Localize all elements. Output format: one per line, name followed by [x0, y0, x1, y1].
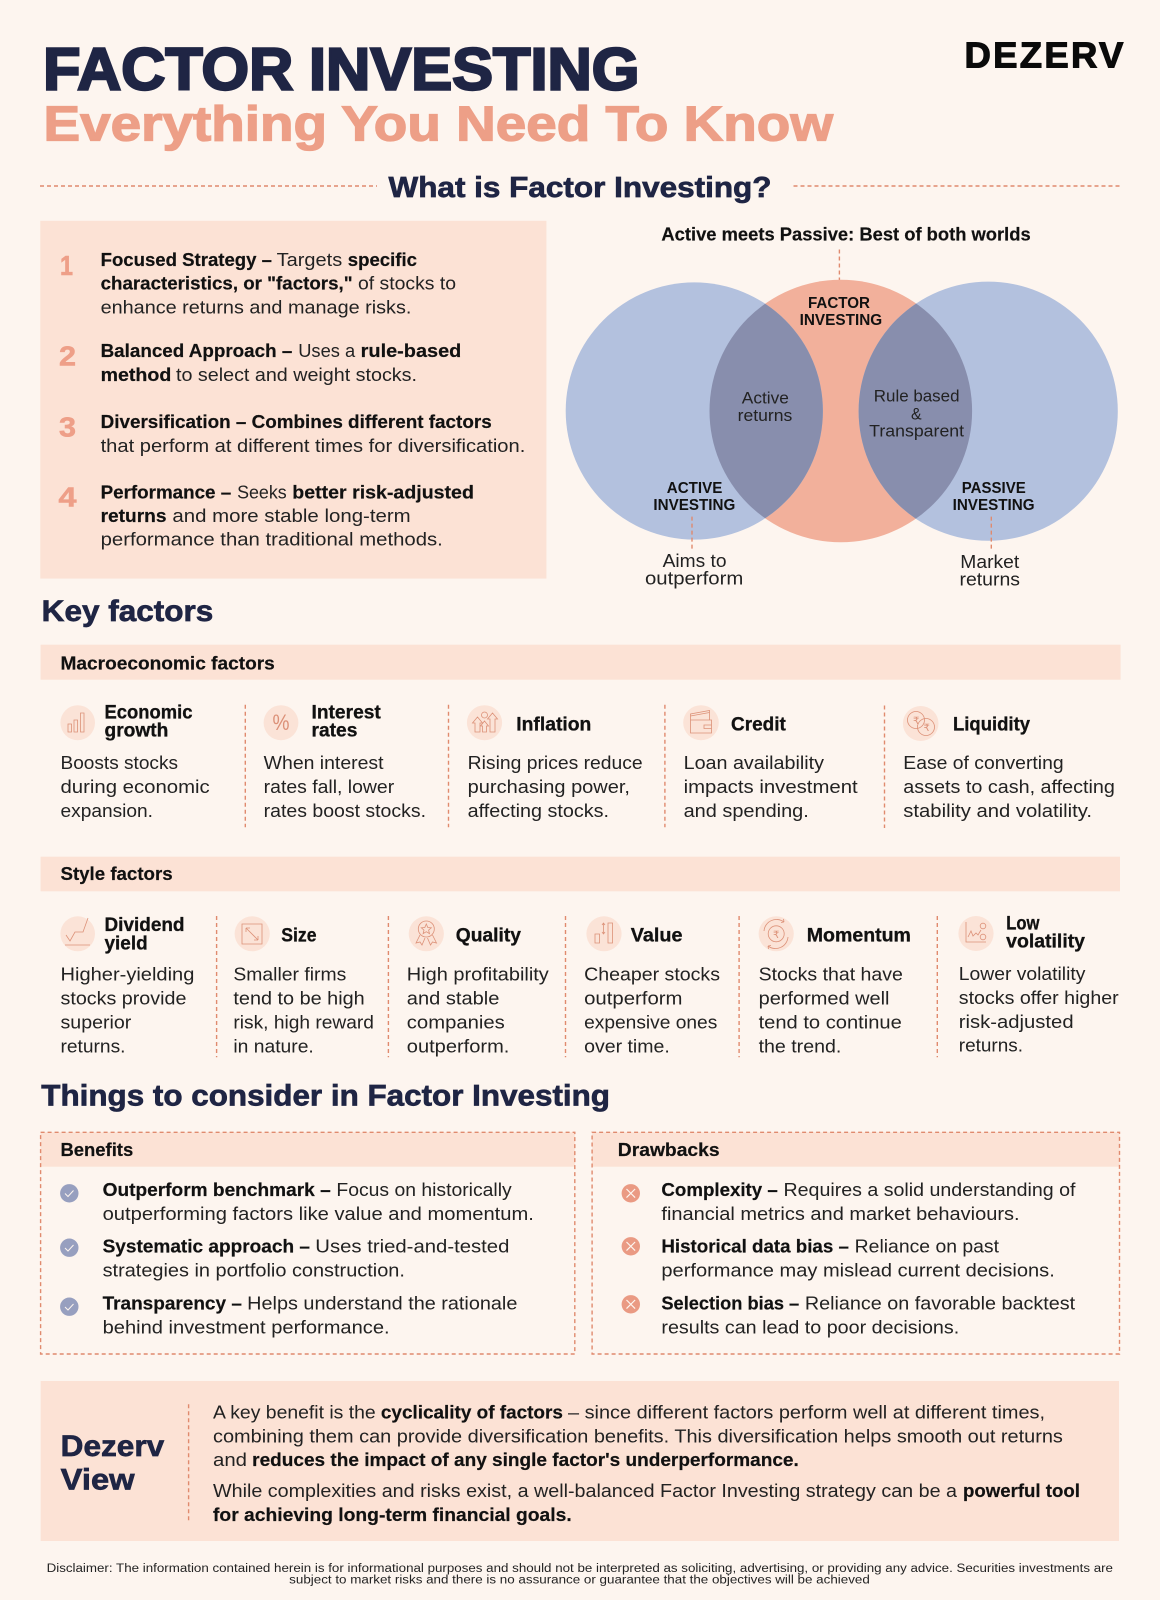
style factor: value: outperform — [584, 988, 682, 1009]
label: passive investing — [953, 480, 1035, 514]
drawback: historical data bias: performance may mislead current decisions. — [661, 1260, 1055, 1281]
title — [43, 36, 834, 152]
style factor: size — [233, 916, 374, 1056]
heading: key factors: Key factors — [42, 595, 213, 628]
item 1: focused strategy: Focused Strategy – — [101, 249, 272, 270]
macro factor: credit — [683, 705, 858, 821]
heading: dezerv view: View — [61, 1463, 135, 1496]
drawback: historical data bias — [622, 1236, 1055, 1281]
style factor: value: Value — [631, 925, 682, 946]
style factor: quality: outperform. — [407, 1035, 509, 1056]
icon: rupee cycle: ₹ — [773, 930, 779, 941]
macro factor: interest rates: rates boost stocks. — [264, 800, 426, 821]
benefit: transparency: Helps understand the rationale — [247, 1292, 517, 1313]
icon: rosette — [409, 916, 444, 951]
item 2: balanced approach — [59, 340, 461, 385]
drawback: selection bias: Reliance on favorable backtest — [805, 1292, 1075, 1313]
style factor: dividend yield: Higher-yielding — [60, 964, 194, 985]
benefit: transparency: Transparency – — [103, 1292, 242, 1313]
section band: macroeconomic factors: Macroeconomic factors — [60, 652, 275, 673]
style factor: dividend yield: superior — [60, 1012, 131, 1033]
macro factor: economic growth: Economic — [104, 702, 193, 723]
item 3: diversification: 3 — [59, 411, 76, 442]
style factor: size: tend to be high — [233, 988, 365, 1009]
style factor: quality: High profitability — [407, 964, 550, 985]
label: active investing: ACTIVE — [667, 480, 723, 497]
icon: cross — [622, 1237, 640, 1256]
item 3: diversification — [59, 411, 525, 456]
style factor: quality — [407, 916, 550, 1056]
icon: cross — [622, 1295, 640, 1314]
item 4: performance: and more stable long-term — [172, 505, 411, 526]
style factor: value — [584, 916, 720, 1056]
icon: value bars — [586, 916, 622, 951]
overlap regions — [710, 304, 972, 519]
item 4: performance: 4 — [58, 481, 77, 512]
disclaimer — [47, 1563, 1113, 1586]
item 1: focused strategy: enhance returns and manage risks. — [101, 296, 411, 317]
label: factor investing — [800, 295, 882, 329]
section band: style factors: Style factors — [60, 863, 173, 884]
style factor: dividend yield: Dividend — [104, 915, 184, 936]
macro factor: inflation: Rising prices reduce — [468, 752, 643, 773]
macro factor: liquidity: stability and volatility. — [903, 800, 1092, 821]
benefit: transparency — [60, 1292, 517, 1337]
item 1: focused strategy: of stocks to — [358, 273, 456, 294]
item 4: performance — [58, 481, 474, 550]
benefit: outperform benchmark — [60, 1179, 534, 1224]
panel: benefits — [41, 1132, 575, 1354]
heading: dezerv view — [61, 1430, 165, 1496]
label: active investing — [653, 480, 735, 514]
macro factor: interest rates: rates — [312, 721, 357, 742]
icon: percent — [264, 705, 298, 740]
label: passive investing: PASSIVE — [962, 480, 1026, 497]
label: active investing: INVESTING — [653, 497, 735, 514]
circle: passive investing — [859, 282, 1118, 541]
panel: numbered definition list — [40, 221, 546, 579]
note: market returns — [960, 551, 1020, 590]
style factor: low volatility: volatility — [1006, 932, 1085, 953]
macro factor: credit: impacts investment — [684, 776, 858, 797]
note: aims to outperform: Aims to — [663, 550, 726, 571]
benefit: systematic approach — [60, 1236, 509, 1281]
drawback: selection bias — [622, 1292, 1075, 1337]
macro factor: inflation: Inflation — [516, 715, 591, 736]
section band: style factors — [41, 857, 1120, 891]
macro factor: interest rates: Interest — [312, 702, 381, 723]
paragraph: powerful tool: for achieving long-term financial goals. — [213, 1504, 572, 1525]
style factor: size: in nature. — [233, 1035, 314, 1056]
macro factor: credit: Credit — [731, 715, 786, 736]
style factor: momentum — [759, 916, 911, 1056]
macro factor: interest rates — [264, 702, 426, 821]
macro factor: economic growth: Boosts stocks — [60, 752, 178, 773]
drawback: complexity: Complexity – — [661, 1179, 778, 1200]
note: aims to outperform — [645, 550, 743, 588]
label: rule based and transparent — [869, 387, 965, 440]
logo: Dezerv: DEZERV — [964, 35, 1124, 76]
venn heading: Active meets Passive: Best of both worlds — [661, 223, 1031, 244]
drawback: selection bias: results can lead to poor decisions. — [661, 1316, 959, 1337]
paragraph: cyclicality of factors — [213, 1401, 1063, 1470]
title: FACTOR — [43, 36, 293, 102]
label: passive investing: INVESTING — [953, 497, 1035, 514]
icon: line chart — [60, 916, 95, 951]
icon: resize square — [235, 916, 270, 951]
icon: rising arrows — [467, 705, 502, 740]
benefit: systematic approach: strategies in portfolio construction. — [103, 1260, 405, 1281]
item 3: diversification: that perform at different times for diversification. — [101, 435, 525, 456]
circle: active investing — [566, 282, 823, 540]
style factor: low volatility: Lower volatility — [959, 963, 1086, 984]
icon: check — [60, 1298, 78, 1316]
icon: coins: ₹ — [913, 716, 919, 727]
style factor: momentum: the trend. — [759, 1035, 841, 1056]
style factor: low volatility: Low — [1006, 913, 1040, 934]
paragraph: cyclicality of factors: cyclicality of factors — [381, 1401, 563, 1422]
drawback: historical data bias: Historical data bias – — [661, 1236, 849, 1257]
paragraph: powerful tool: powerful tool — [963, 1480, 1080, 1501]
style factor: momentum: performed well — [759, 988, 890, 1009]
style factor: low volatility: risk-adjusted — [959, 1011, 1074, 1032]
paragraph: cyclicality of factors: combining them can provide diversification benefits. This diversification helps smooth out returns — [213, 1425, 1063, 1446]
macro factor: credit: Loan availability — [684, 752, 825, 773]
heading: what is factor investing: What is Factor Investing? — [388, 172, 772, 204]
label: rule based and transparent: Transparent — [869, 422, 965, 440]
macro factor: credit: and spending. — [684, 800, 809, 821]
disclaimer: subject to market risks and there is no assurance or guarantee that the objectives will be achieved — [289, 1574, 870, 1586]
style factor: momentum: Momentum — [807, 925, 911, 946]
title: INVESTING — [309, 36, 640, 102]
item 1: focused strategy: 1 — [60, 250, 73, 281]
macro factor: economic growth: growth — [104, 721, 168, 742]
disclaimer: Disclaimer: The information contained herein is for informational purposes and should not be interpreted as soliciting, advertising, or providing any advice. Securities investments are — [47, 1563, 1113, 1575]
macro factor: liquidity: assets to cash, affecting — [903, 776, 1115, 797]
note: market returns: returns — [960, 568, 1020, 590]
item 2: balanced approach: method — [101, 364, 171, 385]
panel: benefits: Benefits — [60, 1139, 133, 1160]
style factor: quality: Quality — [456, 925, 521, 946]
label: factor investing: INVESTING — [800, 312, 882, 329]
drawback: complexity — [622, 1179, 1076, 1224]
style factor: size: Smaller firms — [233, 964, 346, 985]
panel: drawbacks: Drawbacks — [618, 1139, 720, 1160]
style factor: value: over time. — [584, 1035, 670, 1056]
benefit: outperform benchmark: Focus on historically — [336, 1179, 512, 1200]
macro factor: inflation — [467, 705, 643, 821]
style factor: dividend yield — [60, 915, 194, 1056]
item 3: diversification: Diversification – Combines different factors — [101, 411, 492, 432]
macro factor: interest rates: rates fall, lower — [264, 776, 394, 797]
section band: macroeconomic factors — [41, 645, 1121, 680]
label: active returns — [738, 390, 792, 425]
panel: dezerv view — [41, 1381, 1119, 1541]
heading: things to consider: Things to consider in Factor Investing — [41, 1079, 610, 1112]
style factor: value: expensive ones — [584, 1012, 717, 1033]
label: rule based and transparent: Rule based — [874, 387, 960, 405]
label: active returns: Active — [742, 390, 789, 408]
benefit: systematic approach: Uses tried-and-tested — [315, 1236, 509, 1257]
benefit: systematic approach: Systematic approach – — [103, 1236, 310, 1257]
venn diagram: active meets passive — [566, 223, 1118, 590]
item 2: balanced approach: Balanced Approach – — [101, 340, 292, 361]
circle: factor investing — [710, 280, 972, 542]
heading: dezerv view: Dezerv — [61, 1430, 165, 1463]
item 2: balanced approach: Uses a — [298, 340, 356, 361]
icon: wallet — [683, 705, 719, 740]
paragraph: cyclicality of factors: and — [213, 1449, 247, 1470]
paragraph: cyclicality of factors: A key benefit is the — [213, 1401, 376, 1422]
icon: bars — [60, 705, 95, 740]
label: active returns: returns — [738, 407, 792, 425]
item 2: balanced approach: to select and weight stocks. — [176, 364, 417, 385]
title: Everything You Need To Know — [44, 96, 834, 152]
panel: drawbacks — [592, 1132, 1120, 1354]
item 4: performance: performance than traditional methods. — [101, 529, 443, 550]
macro factor: economic growth: expansion. — [60, 800, 153, 821]
label: rule based and transparent: & — [911, 405, 922, 423]
macro factor: economic growth — [60, 702, 210, 821]
item 4: performance: returns — [101, 505, 166, 526]
style factor: low volatility: returns. — [959, 1035, 1023, 1056]
style factor: dividend yield: yield — [104, 933, 148, 954]
style factor: low volatility: stocks offer higher — [959, 987, 1119, 1008]
item 1: focused strategy — [60, 249, 456, 317]
icon: coins: ₹ — [924, 723, 930, 734]
icon: check — [60, 1238, 78, 1257]
paragraph: powerful tool: While complexities and risks exist, a well-balanced Factor Investing strategy can be a — [213, 1480, 958, 1501]
style factor: size: risk, high reward — [233, 1012, 374, 1033]
macro factor: interest rates: When interest — [264, 752, 384, 773]
drawback: complexity: Requires a solid understanding of — [784, 1179, 1076, 1200]
icon: check — [60, 1184, 78, 1203]
item 1: focused strategy: Targets — [277, 249, 342, 270]
macro factor: liquidity — [903, 706, 1115, 821]
drawback: selection bias: Selection bias – — [661, 1292, 799, 1313]
macro factor: liquidity: Liquidity — [953, 715, 1030, 736]
item 2: balanced approach: rule-based — [361, 340, 461, 361]
icon: volatile chart — [958, 916, 994, 951]
icon: cross — [622, 1184, 640, 1203]
item 4: performance: Performance – — [101, 481, 231, 502]
benefit: outperform benchmark: outperforming factors like value and momentum. — [103, 1203, 534, 1224]
icon: percent: % — [272, 710, 290, 735]
benefit: outperform benchmark: Outperform benchmark – — [103, 1179, 331, 1200]
paragraph: cyclicality of factors: – since different factors perform well at different times, — [568, 1401, 1045, 1422]
note: aims to outperform: outperform — [645, 567, 743, 588]
style factor: quality: and stable — [407, 988, 499, 1009]
item 4: performance: Seeks — [237, 481, 287, 502]
style factor: momentum: Stocks that have — [759, 964, 903, 985]
drawback: complexity: financial metrics and market behaviours. — [661, 1203, 1020, 1224]
macro factor: liquidity: Ease of converting — [903, 752, 1064, 773]
style factor: quality: companies — [407, 1012, 505, 1033]
label: factor investing: FACTOR — [808, 295, 870, 312]
benefit: transparency: behind investment performance. — [103, 1316, 390, 1337]
item 4: performance: better risk-adjusted — [292, 481, 474, 502]
style factor: momentum: tend to continue — [759, 1012, 902, 1033]
icon: coins — [903, 706, 938, 741]
item 2: balanced approach: 2 — [59, 340, 76, 372]
style factor: low volatility — [958, 913, 1119, 1056]
style factor: dividend yield: stocks provide — [60, 988, 186, 1009]
note: market returns: Market — [960, 551, 1019, 572]
style factor: value: Cheaper stocks — [584, 964, 720, 985]
item 1: focused strategy: specific — [348, 249, 417, 270]
paragraph: cyclicality of factors: reduces the impact of any single factor's underperformance. — [252, 1449, 799, 1470]
style factor: size: Size — [281, 925, 316, 946]
style factor: dividend yield: returns. — [60, 1035, 126, 1056]
paragraph: powerful tool — [213, 1480, 1080, 1525]
macro factor: economic growth: during economic — [60, 776, 210, 797]
macro factor: inflation: purchasing power, — [468, 776, 630, 797]
item 1: focused strategy: characteristics, or "factors," — [101, 273, 353, 294]
icon: rupee cycle — [759, 916, 794, 951]
drawback: historical data bias: Reliance on past — [855, 1236, 999, 1257]
macro factor: inflation: affecting stocks. — [468, 800, 609, 821]
